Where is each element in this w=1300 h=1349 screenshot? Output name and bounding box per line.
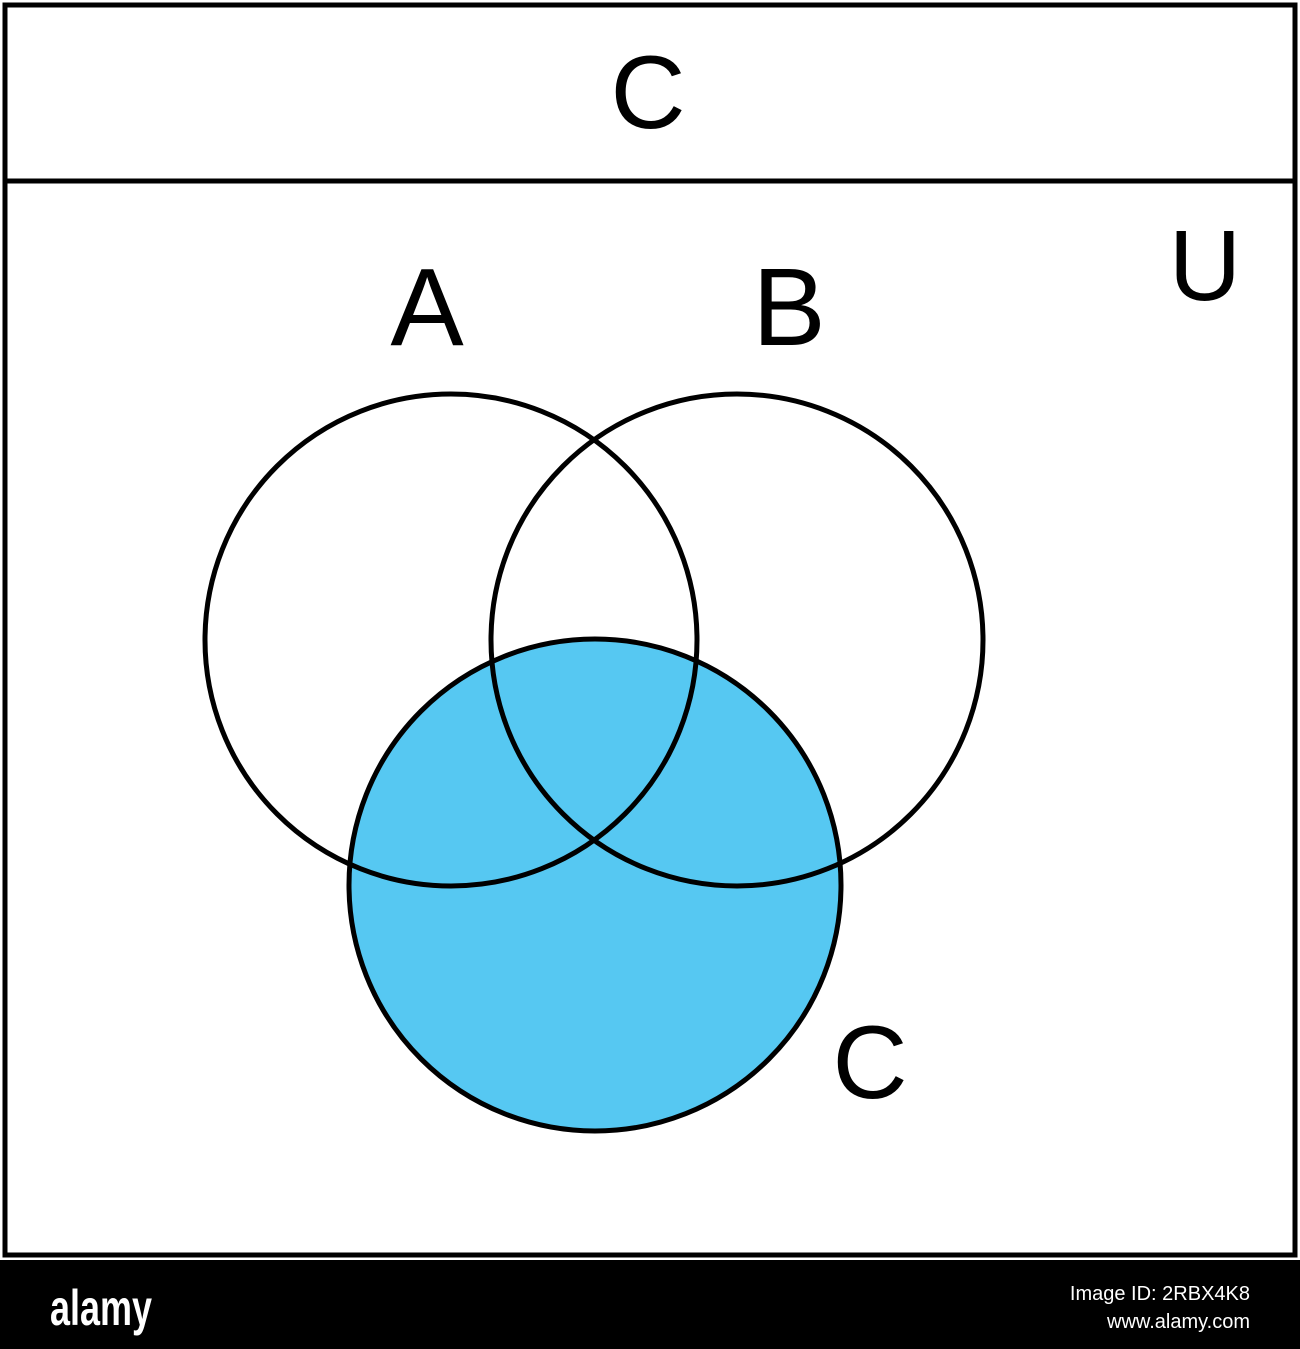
footer bar: Image ID: 2RBX4K8: [1070, 1283, 1250, 1305]
label C: C: [832, 1005, 908, 1121]
label B: B: [752, 246, 826, 369]
footer bar: [0, 1260, 1300, 1349]
footer bar: www.alamy.com: [1106, 1311, 1250, 1333]
label U: U: [1169, 210, 1241, 322]
circles outlines: [205, 394, 983, 1131]
title: C: [610, 35, 686, 151]
circle C shaded: [349, 639, 841, 1131]
label A: A: [390, 246, 464, 369]
footer bar: alamy: [50, 1280, 152, 1336]
